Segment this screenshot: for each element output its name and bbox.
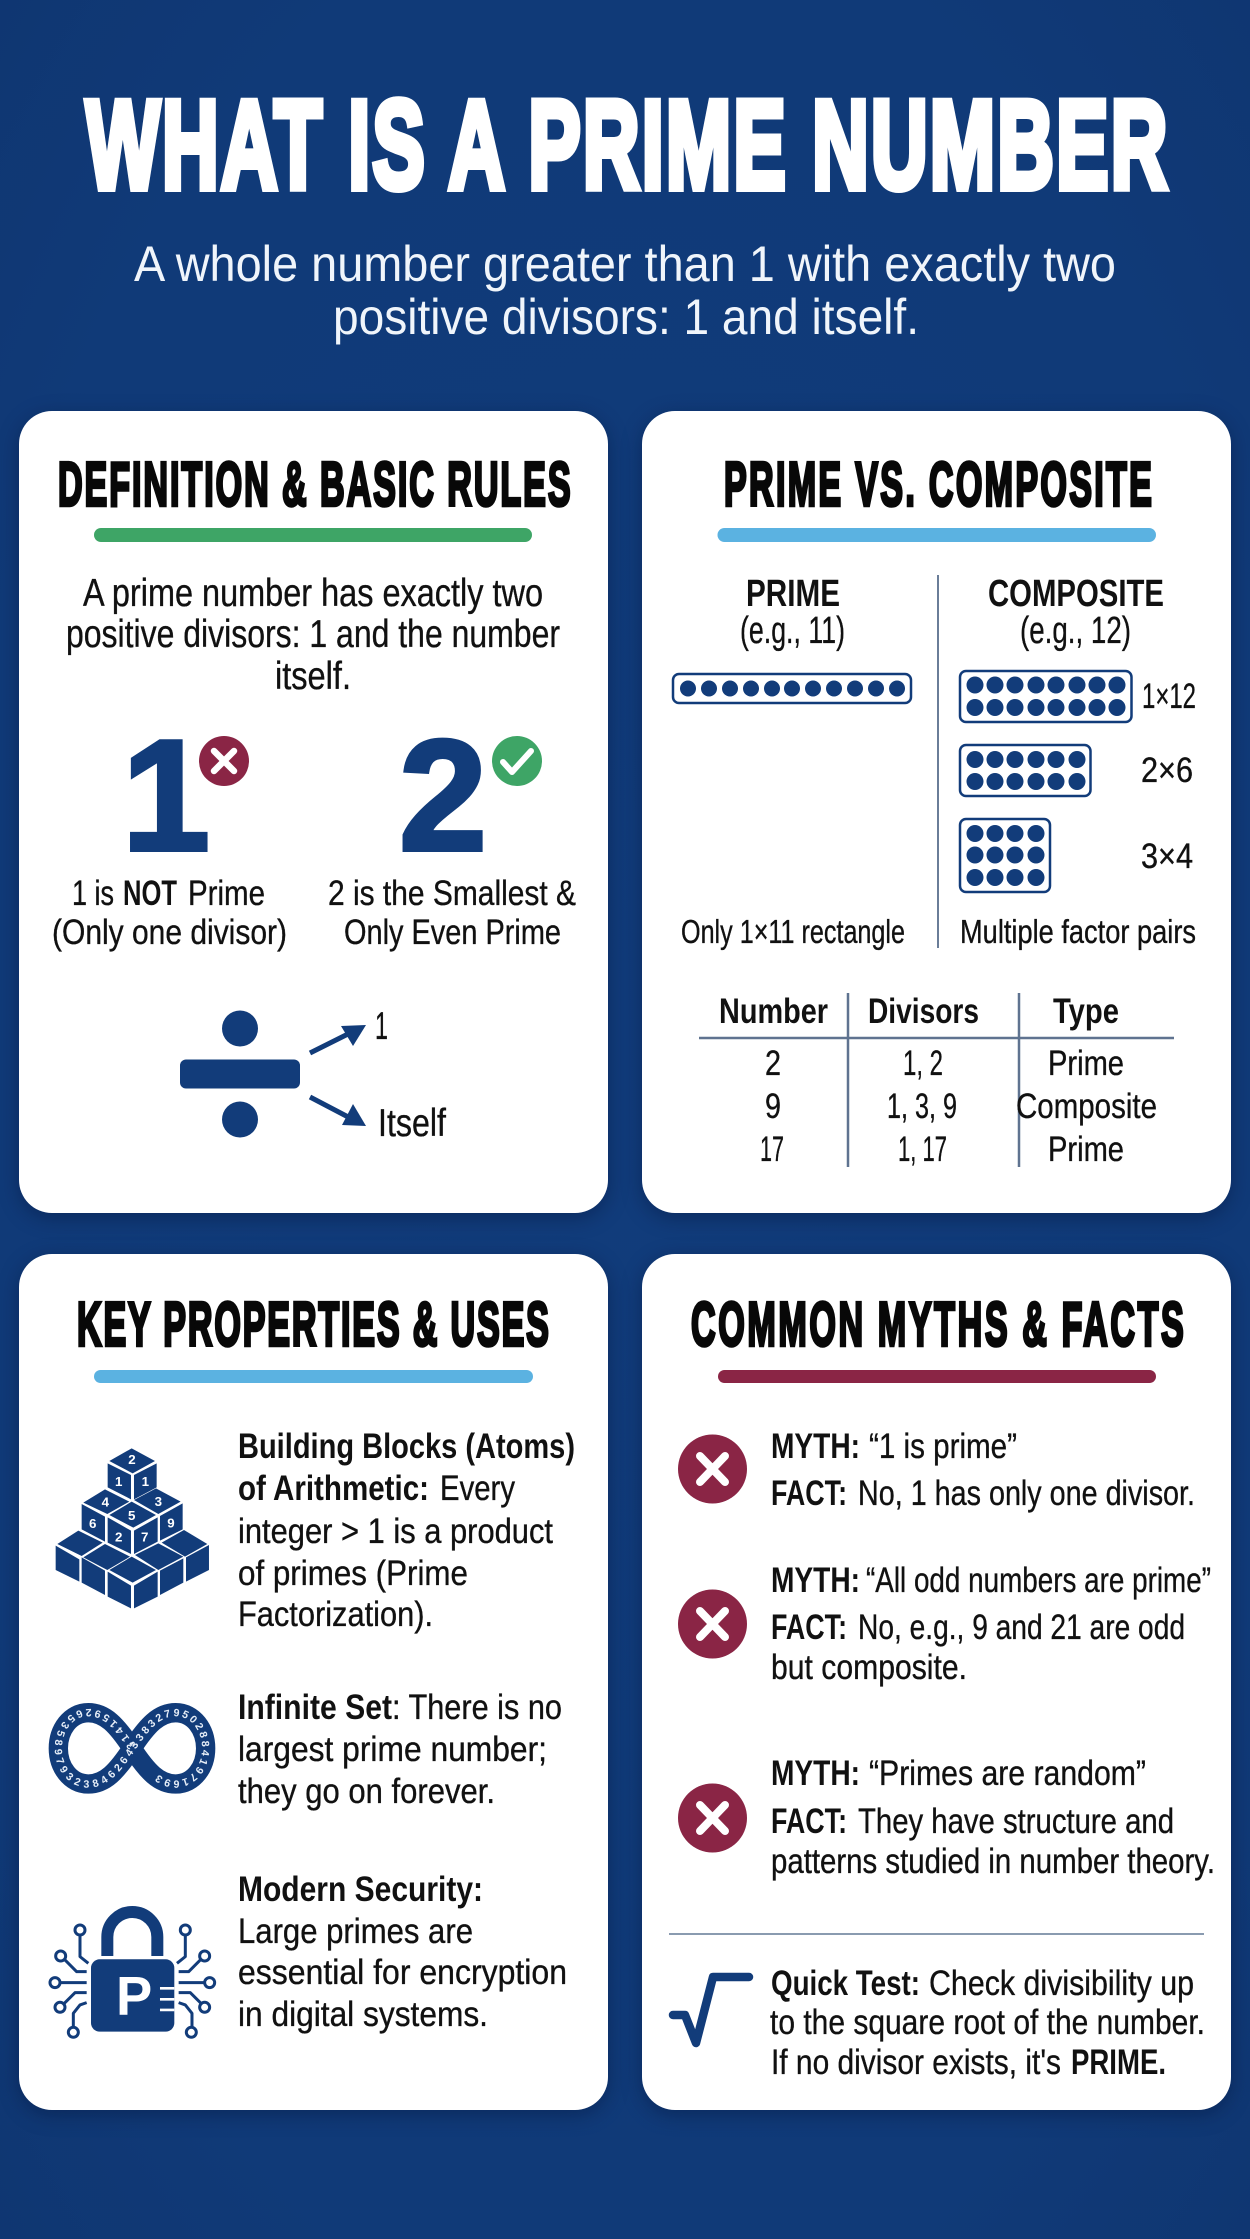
title: WHAT IS A PRIME NUMBER (86, 76, 1167, 216)
text: building blocks: of Arithmetic: (238, 1469, 429, 1508)
myth 2: but composite. (771, 1648, 967, 1687)
icon: number cube pyramid: 6 (89, 1516, 96, 1531)
myth 1: MYTH: (771, 1427, 860, 1466)
text: building blocks (238, 1427, 575, 1634)
icon: number cube pyramid (56, 1448, 209, 1608)
myth 1: “1 is prime” (869, 1427, 1017, 1466)
number 2 with check badge: 2 (399, 708, 487, 884)
table of divisors: 17 (760, 1130, 784, 1169)
quick test text: If no divisor exists, it's (771, 2043, 1061, 2082)
heading: prime vs composite: PRIME VS. COMPOSITE (724, 450, 1152, 519)
icon: number cube pyramid: 3 (155, 1494, 162, 1509)
icon: number cube pyramid: 7 (141, 1529, 148, 1544)
text: modern security (238, 1870, 567, 2034)
table of divisors: 1, 17 (898, 1130, 947, 1169)
myth 2: MYTH: (771, 1561, 860, 1600)
heading: myths and facts: COMMON MYTHS & FACTS (691, 1290, 1184, 1359)
dot array: 3x4 (960, 819, 1050, 892)
icon: square root (673, 1977, 749, 2043)
table of divisors: Number (719, 992, 828, 1031)
prime column heading: (e.g., 11) (740, 610, 845, 652)
green underline (94, 528, 532, 542)
text: modern security: in digital systems. (238, 1995, 488, 2034)
icon: number cube pyramid: 2 (115, 1529, 122, 1544)
composite column heading (988, 573, 1164, 652)
table of divisors: Divisors (868, 992, 979, 1031)
panel: prime vs composite (642, 411, 1231, 1213)
caption: 1 is not prime: (Only one divisor) (52, 913, 287, 952)
myth 1: FACT: (771, 1474, 847, 1513)
caption: multiple factor pairs: Multiple factor pairs (960, 913, 1196, 950)
caption: 2 is smallest: Only Even Prime (344, 913, 561, 952)
myth 3: MYTH: (771, 1754, 860, 1793)
text: modern security: Modern Security: (238, 1870, 483, 1909)
maroon underline (718, 1370, 1156, 1383)
myth 3 (771, 1754, 1215, 1881)
myth 3: “Primes are random” (869, 1754, 1146, 1793)
text: building blocks: integer > 1 is a product (238, 1512, 553, 1551)
icon: cross badge 1 (678, 1434, 747, 1504)
arrow to itself (310, 1097, 366, 1126)
myth 3: They have structure and (858, 1802, 1174, 1841)
label: 3x4: 3×4 (1141, 837, 1193, 876)
caption: only 1x11: Only 1×11 rectangle (681, 913, 905, 950)
icon: padlock with circuit (50, 1912, 215, 2037)
icon: padlock with circuit: P (116, 1966, 152, 2027)
composite column heading: (e.g., 12) (1020, 610, 1131, 652)
text: infinite set: they go on forever. (238, 1772, 495, 1811)
icon: cross badge 2 (678, 1590, 747, 1658)
caption: 1 is not prime: NOT (123, 874, 177, 913)
text: infinite set: Infinite Set (238, 1688, 392, 1727)
subtitle (134, 236, 1116, 345)
icon: number cube pyramid: 4 (102, 1495, 110, 1510)
quick test text (770, 1964, 1205, 2082)
icon: number cube pyramid: 2 (128, 1452, 136, 1467)
text: building blocks: of primes (Prime (238, 1554, 468, 1593)
caption: 2 is smallest: 2 is the Smallest & (328, 874, 576, 913)
table of divisors: 9 (765, 1087, 781, 1126)
number 1 with cross badge (122, 708, 249, 884)
text: building blocks: Building Blocks (Atoms) (238, 1427, 575, 1466)
panel: common myths and facts (642, 1254, 1231, 2110)
heading: key properties: KEY PROPERTIES & USES (77, 1290, 549, 1359)
arrow to 1 (310, 1025, 366, 1053)
quick test text: Check divisibility up (929, 1964, 1194, 2003)
label: 1: 1 (375, 1005, 388, 1048)
number 1 with cross badge: 1 (122, 708, 210, 884)
icon: number cube pyramid: 1 (115, 1474, 123, 1489)
icon: number cube pyramid: 5 (128, 1508, 136, 1523)
myth 2: FACT: (771, 1608, 847, 1647)
prime column heading: PRIME (746, 573, 840, 615)
table of divisors: Type (1053, 992, 1119, 1031)
quick test text: Quick Test: (771, 1964, 920, 2003)
table of divisors: 2 (765, 1044, 781, 1083)
panel: definition and basic rules (19, 411, 608, 1213)
blue underline (94, 1370, 533, 1383)
table of divisors (699, 992, 1174, 1169)
panel: key properties and uses (14, 1253, 614, 2120)
caption: 1 is not prime: 1 is (72, 874, 114, 913)
table of divisors: Prime (1048, 1130, 1124, 1169)
text: building blocks: Every (440, 1469, 515, 1508)
icon: number cube pyramid: 1 (142, 1474, 150, 1489)
label: itself: Itself (378, 1102, 446, 1145)
label: 2x6: 2×6 (1141, 751, 1193, 790)
definition text: A prime number has exactly two (83, 572, 543, 615)
definition text: itself. (275, 655, 351, 698)
caption: 2 is smallest (328, 874, 576, 952)
text: infinite set: largest prime number; (238, 1730, 547, 1769)
subtitle: A whole number greater than 1 with exactly two (134, 236, 1116, 292)
definition text (66, 572, 560, 698)
text: building blocks: Factorization). (238, 1595, 433, 1634)
icon: infinity of digits: 31415926535897932384626433832795028841971693 (54, 1708, 210, 1788)
composite column heading: COMPOSITE (988, 573, 1164, 615)
icon: division symbol (180, 1010, 300, 1138)
myth 2 (771, 1561, 1211, 1687)
definition text: positive divisors: 1 and the number (66, 613, 560, 656)
icon: number cube pyramid: 9 (167, 1515, 175, 1530)
table of divisors: 1, 3, 9 (887, 1087, 957, 1126)
dot array: 2x6 (960, 745, 1090, 796)
text: modern security: Large primes are (238, 1912, 473, 1951)
blue underline (718, 528, 1156, 542)
text: infinite set: : There is no (392, 1688, 562, 1727)
dot array: 1x12 (960, 671, 1132, 722)
myth 3: FACT: (771, 1802, 847, 1841)
heading: definition: DEFINITION & BASIC RULES (58, 450, 571, 519)
table of divisors: Prime (1048, 1044, 1124, 1083)
column divider (937, 575, 939, 948)
subtitle: positive divisors: 1 and itself. (333, 289, 919, 345)
text: modern security: essential for encryption (238, 1953, 567, 1992)
icon: cross badge 3 (678, 1784, 747, 1852)
myth 1 (771, 1427, 1195, 1513)
text: infinite set (238, 1688, 562, 1811)
number 2 with check badge (399, 708, 542, 884)
table of divisors: 1, 2 (903, 1044, 943, 1083)
caption: 1 is not prime (52, 874, 287, 952)
caption: 1 is not prime: Prime (188, 874, 265, 913)
dot array: 1 by 11 (673, 674, 911, 703)
prime column heading (740, 573, 845, 652)
quick test text: PRIME. (1071, 2043, 1166, 2082)
label: 1x12: 1×12 (1142, 677, 1196, 716)
table of divisors: Composite (1016, 1087, 1157, 1126)
